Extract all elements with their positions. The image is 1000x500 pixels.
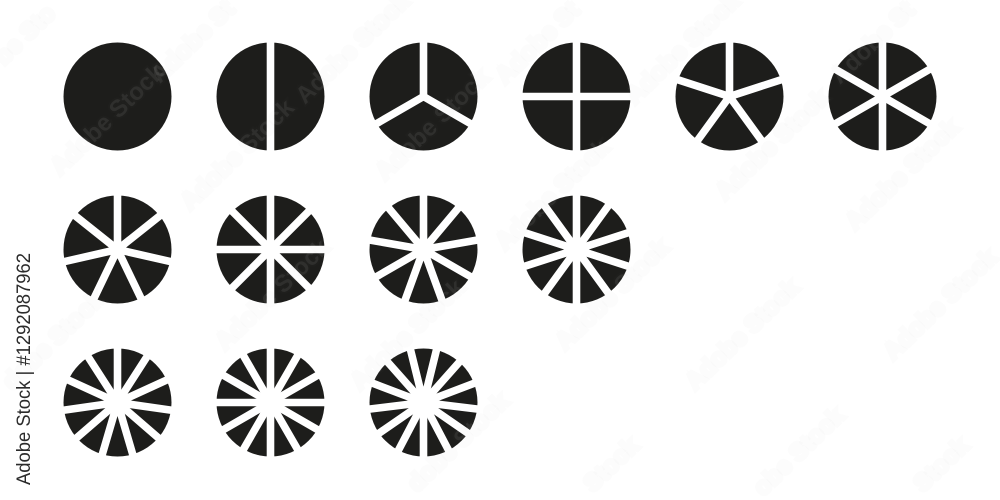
- watermark pattern: Adobe Stock: [710, 84, 835, 205]
- watermark pattern: Adobe Stock: [45, 59, 170, 180]
- watermark pattern: obe Stock: [748, 402, 850, 500]
- watermark pattern: Adobe Stock: [550, 234, 675, 355]
- watermark pattern: Adobe Stock: [370, 64, 495, 185]
- watermark pattern: Adobe Stock: [175, 94, 300, 215]
- watermark pattern: Adobe Stock: [210, 234, 335, 355]
- pie: 5 segments: [672, 36, 787, 150]
- pie: 8 segments: [210, 190, 330, 310]
- pie: 6 segments: [828, 36, 936, 156]
- vertical stock ID text: Adobe Stock | #1292087962: [13, 253, 35, 485]
- watermark pattern: Stock: [908, 432, 975, 497]
- watermark pattern: dobe Stock: [402, 388, 515, 497]
- pie: 2 segments: [216, 36, 324, 156]
- pie: 4 segments: [516, 36, 636, 156]
- pie: 9 segments: [364, 190, 483, 306]
- watermark pattern: Adobe Stock: [680, 274, 805, 395]
- pie: 13 segments: [364, 344, 483, 462]
- watermark pattern: Adobe Stock: [878, 244, 1000, 365]
- pie: 7 segments: [59, 190, 176, 304]
- pie: 12 segments: [210, 342, 330, 462]
- pie: 10 segments: [519, 190, 634, 310]
- watermark pattern: Stock: [578, 432, 645, 497]
- pie: 11 segments: [58, 342, 177, 460]
- pie: whole circle, 1 segment: [64, 42, 172, 150]
- watermark pattern: Adobe Stock: [345, 274, 470, 395]
- watermark pattern: Adobe Stock: [490, 134, 615, 255]
- watermark pattern: dobe Stock: [0, 286, 110, 395]
- watermark pattern: Adobe Stock: [840, 114, 965, 235]
- pie: 3 segments: [370, 36, 478, 150]
